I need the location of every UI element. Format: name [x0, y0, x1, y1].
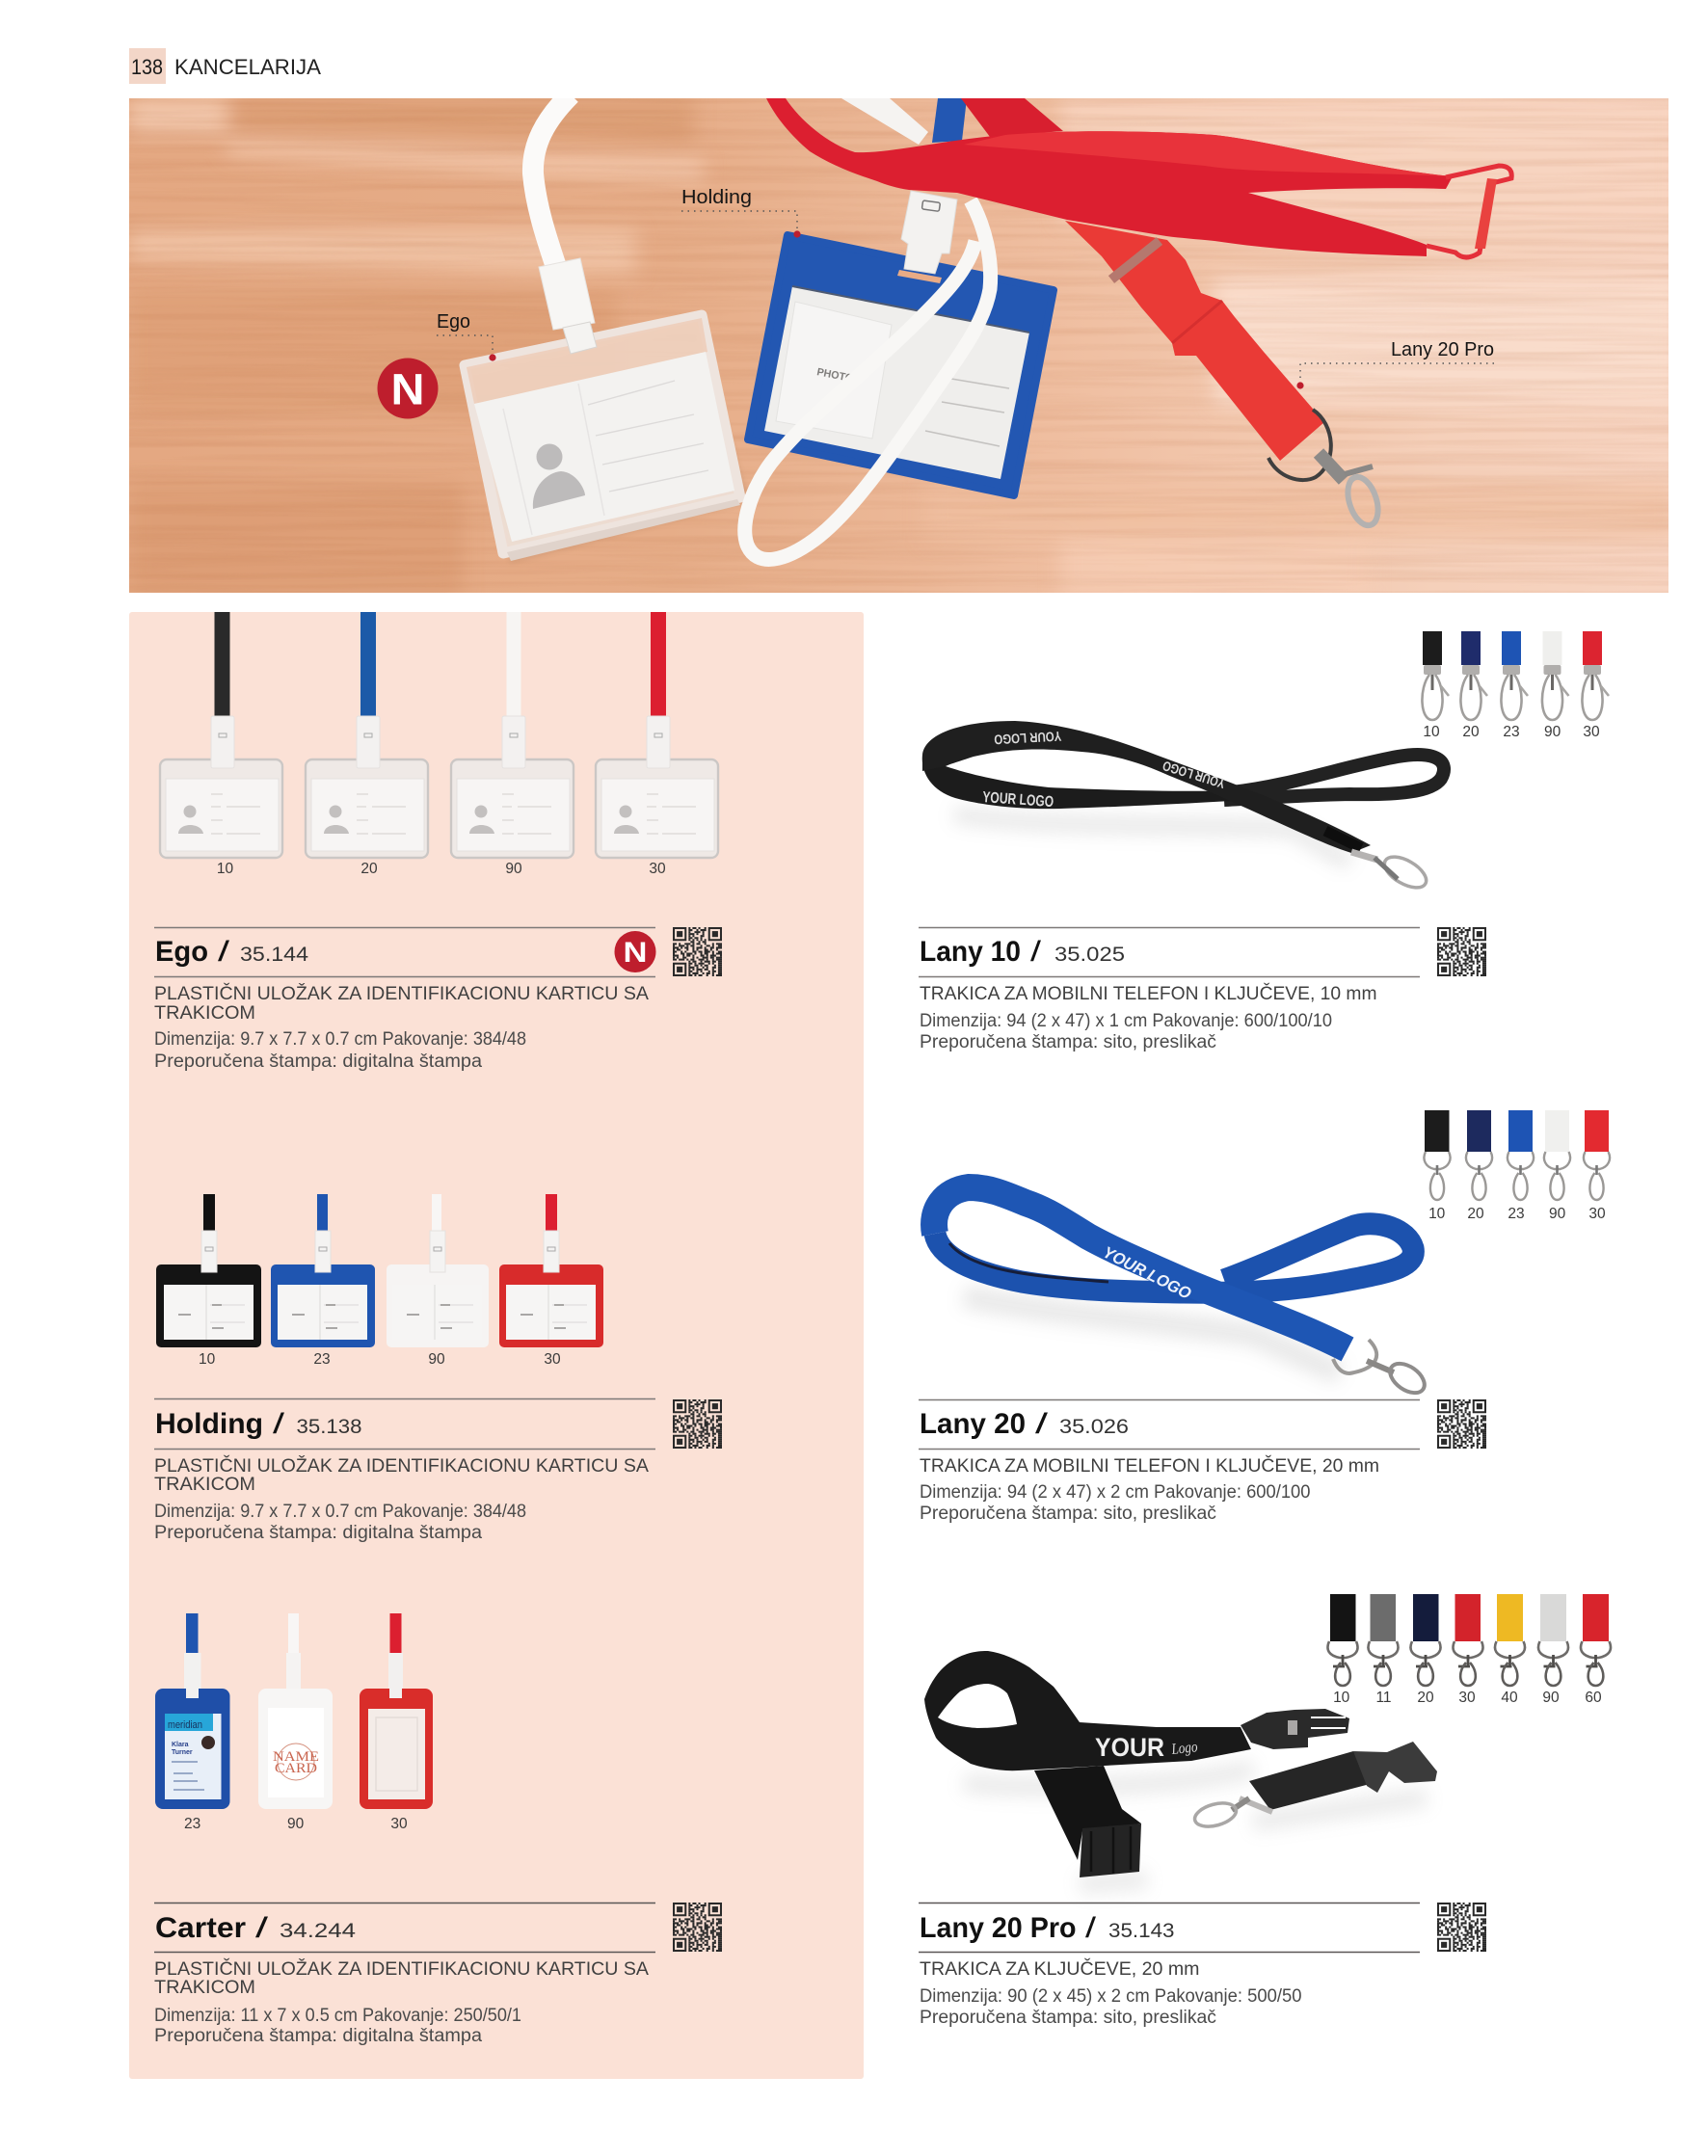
lany 20 colour codes: 10: [1428, 1206, 1446, 1222]
swatch navy: [1466, 1110, 1492, 1200]
lany 20 pro description: Preporučena štampa: sito, preslikač: [920, 2008, 1216, 2028]
lany 20 lanyard: [934, 1187, 1429, 1398]
carter description: [154, 1957, 649, 2046]
holding title: 35.138: [297, 1416, 362, 1438]
swatch white: [1544, 1110, 1570, 1200]
ego description: Dimenzija: 9.7 x 7.7 x 0.7 cm Pakovanje: 384/48: [154, 1029, 526, 1050]
lany 20 pro colour codes: 30: [1458, 1690, 1476, 1706]
lany 20 pro title: Lany 20 Pro: [920, 1912, 1076, 1944]
panel: hero photo: [129, 94, 1677, 598]
ego white: [451, 612, 574, 858]
product: lany 10: [919, 927, 1486, 1052]
carter blue: meridian: [168, 1719, 202, 1731]
lany 10 colour codes: 23: [1503, 724, 1520, 740]
lany 20 pro colour codes: 60: [1585, 1690, 1602, 1706]
carter blue: Klara: [172, 1742, 189, 1748]
carter description: PLASTIČNI ULOŽAK ZA IDENTIFIKACIONU KARTICU SA: [154, 1957, 649, 1980]
product: carter: [154, 1903, 722, 2046]
holding description: Preporučena štampa: digitalna štampa: [154, 1523, 482, 1543]
logo print: YOUR LOGO: [1100, 1243, 1194, 1303]
ego title: /: [218, 936, 230, 968]
holding title: [155, 1408, 362, 1440]
lany 20 pro colour codes: [1333, 1690, 1602, 1706]
lany 10 colour codes: 90: [1544, 724, 1561, 740]
logo print upper left: YOUR LOGO: [994, 729, 1062, 748]
holding blue badge in photo: [748, 235, 1054, 495]
carter colour codes: 30: [390, 1816, 408, 1832]
holding qr: [673, 1400, 722, 1448]
lany 20 pro description: TRAKICA ZA KLJUČEVE, 20 mm: [920, 1957, 1199, 1980]
lany 20 title: /: [1035, 1408, 1049, 1440]
ego description: [154, 982, 649, 1072]
lany 20 pro colour codes: 90: [1542, 1690, 1560, 1706]
carter colour codes: 23: [184, 1816, 200, 1832]
ego badge in photo: [465, 315, 749, 563]
ego description: Preporučena štampa: digitalna štampa: [154, 1051, 482, 1072]
lany 20 colour codes: 30: [1588, 1206, 1606, 1222]
page number box: [129, 48, 166, 84]
callout: lany 20 pro: Lany 20 Pro: [1391, 339, 1494, 360]
carter title: Carter: [155, 1912, 246, 1944]
holding colour codes: 90: [428, 1351, 445, 1368]
ego qr: [673, 928, 722, 975]
holding title: /: [273, 1408, 285, 1440]
product: lany 20 pro: [919, 1903, 1486, 2028]
carter blue: Turner: [172, 1749, 193, 1756]
swatch black: [1327, 1594, 1358, 1686]
swatch red: [1584, 1110, 1610, 1200]
lany 20 title: Lany 20: [920, 1408, 1026, 1440]
carter description: TRAKICOM: [154, 1977, 255, 1998]
lany 20 colour codes: 23: [1508, 1206, 1525, 1222]
lany 20 pro red lanyard in photo: [766, 98, 1511, 461]
lany 10 title: /: [1030, 936, 1042, 968]
lany 10 colour codes: 10: [1423, 724, 1440, 740]
lany 20 pro colour codes: 20: [1417, 1690, 1434, 1706]
callout: holding: Holding: [681, 187, 752, 208]
swatch blue: [1508, 1110, 1534, 1200]
new badge small: N: [623, 937, 648, 969]
lany 20 pro colour codes: 40: [1501, 1690, 1518, 1706]
holding description: PLASTIČNI ULOŽAK ZA IDENTIFIKACIONU KARTICU SA: [154, 1454, 649, 1477]
lany 10 colour swatches: [1422, 631, 1609, 740]
swatch grey: [1368, 1594, 1399, 1686]
holding colour codes: 30: [544, 1351, 561, 1368]
lany 20 description: Preporučena štampa: sito, preslikač: [920, 1504, 1216, 1524]
lany 20 title: 35.026: [1059, 1416, 1129, 1438]
lany 10 qr: [1437, 928, 1486, 975]
ego title: Ego: [155, 936, 208, 968]
holding description: [154, 1454, 649, 1543]
carter colour codes: [184, 1816, 408, 1832]
product: holding: [154, 1399, 722, 1543]
ego colour codes: 20: [360, 861, 378, 877]
lany 10 title: [920, 936, 1125, 968]
lany 10 colour codes: 30: [1583, 724, 1600, 740]
holding blue: [271, 1194, 375, 1347]
lany 10 description: Dimenzija: 94 (2 x 47) x 1 cm Pakovanje: 600/100/10: [920, 1011, 1332, 1031]
logo print: Logo: [1170, 1739, 1198, 1758]
carter title: /: [255, 1912, 269, 1944]
callout: lany 20 pro: [1296, 339, 1494, 389]
lany 20 pro colour codes: 10: [1333, 1690, 1350, 1706]
holding colour codes: 23: [313, 1351, 331, 1368]
carter colour codes: 90: [287, 1816, 305, 1832]
lany 10 description: [920, 982, 1376, 1052]
ego thumbnails: [160, 612, 718, 877]
lany 20 pro colour codes: 11: [1375, 1690, 1392, 1706]
lany 20 colour codes: 20: [1467, 1206, 1484, 1222]
ego description: TRAKICOM: [154, 1002, 255, 1024]
lany 20 colour codes: 90: [1549, 1206, 1566, 1222]
swatch yellow: [1495, 1594, 1525, 1686]
carter blue: [155, 1613, 229, 1809]
holding white lanyard in photo: [745, 98, 991, 559]
callout: ego: [437, 311, 496, 361]
holding description: Dimenzija: 9.7 x 7.7 x 0.7 cm Pakovanje: 384/48: [154, 1502, 526, 1522]
swatch white: [1542, 631, 1569, 720]
lany 10 title: Lany 10: [920, 936, 1021, 968]
ego title: 35.144: [240, 944, 308, 966]
lany 20 colour codes: [1428, 1206, 1606, 1222]
callout: holding: [681, 187, 801, 238]
section title: KANCELARIJA: [174, 55, 321, 79]
lany 20 pro description: Dimenzija: 90 (2 x 45) x 2 cm Pakovanje: 500/50: [920, 1986, 1301, 2007]
callout: ego: Ego: [437, 311, 470, 333]
swatch black: [1424, 1110, 1451, 1200]
lany 20 pro colour swatches: [1327, 1594, 1611, 1706]
carter description: Preporučena štampa: digitalna štampa: [154, 2026, 482, 2046]
logo print: YOUR: [1095, 1733, 1164, 1762]
lany 20 pro title: [920, 1912, 1174, 1944]
holding black: [156, 1194, 261, 1347]
swatch scarlet: [1581, 1594, 1611, 1686]
carter white: NAME: [273, 1749, 319, 1765]
ego colour codes: 30: [649, 861, 666, 877]
carabiner in photo: [1268, 410, 1383, 529]
holding colour codes: [199, 1351, 561, 1368]
carter title: [155, 1912, 356, 1944]
ego title: [155, 936, 308, 968]
lany 20 pro qr: [1437, 1903, 1486, 1951]
ego blue: [306, 612, 428, 858]
carter white: [258, 1613, 333, 1809]
swatch navy: [1460, 631, 1487, 720]
swatch light: [1538, 1594, 1568, 1686]
lany 10 colour codes: 20: [1462, 724, 1480, 740]
lany 20 qr: [1437, 1400, 1486, 1448]
new badge: [378, 359, 438, 418]
lany 20 description: Dimenzija: 94 (2 x 47) x 2 cm Pakovanje: 600/100: [920, 1482, 1311, 1503]
ego colour codes: 90: [505, 861, 522, 877]
holding red: [499, 1194, 603, 1347]
lany 10 lanyard: [922, 721, 1444, 893]
holding white: [387, 1194, 489, 1347]
swatch red: [1453, 1594, 1483, 1686]
carter title: 34.244: [280, 1920, 356, 1942]
ego red: [596, 612, 718, 858]
lany 10 title: 35.025: [1054, 944, 1125, 966]
holding description: TRAKICOM: [154, 1474, 255, 1495]
ego black: [160, 612, 282, 858]
ego description: PLASTIČNI ULOŽAK ZA IDENTIFIKACIONU KARTICU SA: [154, 982, 649, 1004]
carter description: Dimenzija: 11 x 7 x 0.5 cm Pakovanje: 250/50/1: [154, 2006, 521, 2026]
lany 10 colour codes: [1423, 724, 1600, 740]
lany 20 title: [920, 1408, 1129, 1440]
lany 20 description: [920, 1454, 1379, 1524]
product: ego: [154, 927, 722, 1072]
ego colour codes: 10: [217, 861, 233, 877]
logo print front: YOUR LOGO: [982, 789, 1054, 811]
photo label on card: PHOTO: [815, 366, 854, 385]
swatch red: [1582, 631, 1609, 720]
carter qr: [673, 1903, 722, 1951]
ego colour codes: [217, 861, 666, 877]
holding blue strap and clip: [897, 98, 967, 283]
swatch blue: [1501, 631, 1528, 720]
holding thumbnails: [156, 1194, 603, 1368]
product: lany 20: [919, 1399, 1486, 1524]
lany 20 pro lanyard: [924, 1651, 1437, 1884]
carter red: [360, 1613, 433, 1809]
lany 20 description: TRAKICA ZA MOBILNI TELEFON I KLJUČEVE, 20 mm: [920, 1454, 1379, 1477]
swatch navy: [1410, 1594, 1441, 1686]
carter thumbnails: [155, 1613, 433, 1832]
lany 10 description: Preporučena štampa: sito, preslikač: [920, 1032, 1216, 1052]
lany 20 pro title: 35.143: [1108, 1920, 1174, 1942]
carter white: CARD: [275, 1761, 317, 1776]
lany 20 colour swatches: [1424, 1110, 1610, 1222]
lany 20 pro description: [920, 1957, 1301, 2028]
holding colour codes: 10: [199, 1351, 216, 1368]
new badge: N: [391, 364, 424, 414]
logo print centre: YOUR LOGO: [1161, 759, 1227, 791]
panel: badge holders: [129, 612, 864, 2079]
lany 10 description: TRAKICA ZA MOBILNI TELEFON I KLJUČEVE, 10 mm: [920, 982, 1376, 1004]
page number: 138: [131, 55, 163, 79]
ego white lanyard and clip: [533, 94, 597, 354]
holding title: Holding: [155, 1408, 263, 1440]
swatch black: [1422, 631, 1449, 720]
new badge small: [615, 931, 655, 972]
lany 20 pro title: /: [1085, 1912, 1097, 1944]
